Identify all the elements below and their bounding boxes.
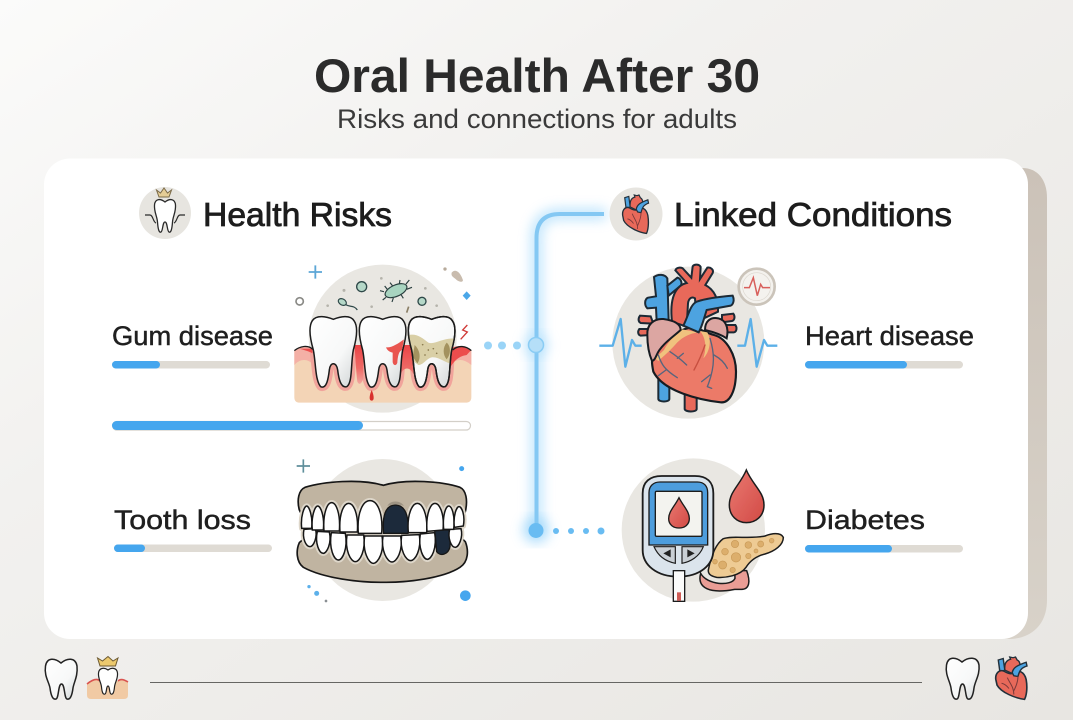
gums xyxy=(294,345,472,403)
subtitle: Risks and connections for adults xyxy=(337,104,737,134)
heading: linked conditions: Linked Conditions xyxy=(674,196,952,233)
label: gum disease: Gum disease xyxy=(112,321,273,351)
heart body xyxy=(652,328,736,402)
panel: main card xyxy=(44,158,1028,639)
bacteria and specks xyxy=(296,265,471,339)
sparkles xyxy=(297,459,471,602)
blood drip xyxy=(370,390,374,401)
large blood drop xyxy=(729,470,764,523)
side vessels xyxy=(638,314,736,336)
decay patch xyxy=(408,335,455,365)
title: Oral Health After 30 xyxy=(314,49,760,102)
tooth halos xyxy=(301,501,464,563)
bite line xyxy=(323,531,450,536)
blood on teeth xyxy=(386,339,404,365)
tooth left xyxy=(310,317,357,387)
decay outline xyxy=(408,317,455,387)
label: heart disease: Heart disease xyxy=(805,321,974,351)
connector: lower node and dots xyxy=(528,523,604,538)
icon: heart header badge xyxy=(610,188,662,240)
tooth middle xyxy=(359,317,406,387)
connector: glowing line xyxy=(484,214,606,543)
coronary vessels xyxy=(658,338,727,388)
heading: health risks: Health Risks xyxy=(203,196,392,233)
tooth right xyxy=(408,317,455,387)
pulse lines xyxy=(599,319,777,367)
upper gum xyxy=(298,481,466,532)
right atrium xyxy=(705,318,727,338)
footer: tooth icon right xyxy=(946,658,979,699)
illustration: tooth loss dentures xyxy=(297,459,471,602)
meter buttons xyxy=(654,547,703,563)
progress bar: gum disease xyxy=(112,361,270,368)
yellow fat bands xyxy=(655,329,710,361)
label: diabetes: Diabetes xyxy=(805,505,925,535)
lower teeth xyxy=(303,529,462,563)
connector: upper node and dots xyxy=(484,338,544,352)
footer: heart icon right xyxy=(996,657,1027,699)
dark gaps xyxy=(383,505,408,533)
footer: tooth icon left xyxy=(45,659,77,699)
pancreas duct xyxy=(700,571,749,591)
meter body xyxy=(643,476,713,577)
vena cava xyxy=(645,275,669,322)
label: tooth loss: Tooth loss xyxy=(114,505,251,535)
illustration: anatomical heart with pulse xyxy=(599,265,777,419)
lower gum xyxy=(297,533,467,582)
progress bar: tooth loss xyxy=(114,544,272,552)
pulmonary artery xyxy=(683,296,734,332)
panel: card shadow xyxy=(990,168,1047,639)
aorta xyxy=(671,265,718,327)
progress bar: diabetes xyxy=(805,545,963,552)
small blood drop xyxy=(669,498,689,528)
illustration: gum disease teeth xyxy=(294,265,471,413)
footer: tooth with crown and gum icon xyxy=(87,656,128,699)
progress bar: heart disease xyxy=(805,361,963,368)
pancreas xyxy=(708,534,783,577)
upper teeth xyxy=(301,501,464,533)
illustration: glucose meter, drop and pancreas xyxy=(622,458,783,602)
meter screen xyxy=(655,491,702,536)
left atrium xyxy=(647,319,681,361)
lower vessels xyxy=(658,368,669,401)
icon: tooth with crown header badge xyxy=(139,187,191,239)
pulse monitor badge xyxy=(739,269,775,305)
test strip xyxy=(673,571,685,601)
footer: divider line xyxy=(150,682,922,684)
progress bar: wide divider xyxy=(112,421,470,430)
